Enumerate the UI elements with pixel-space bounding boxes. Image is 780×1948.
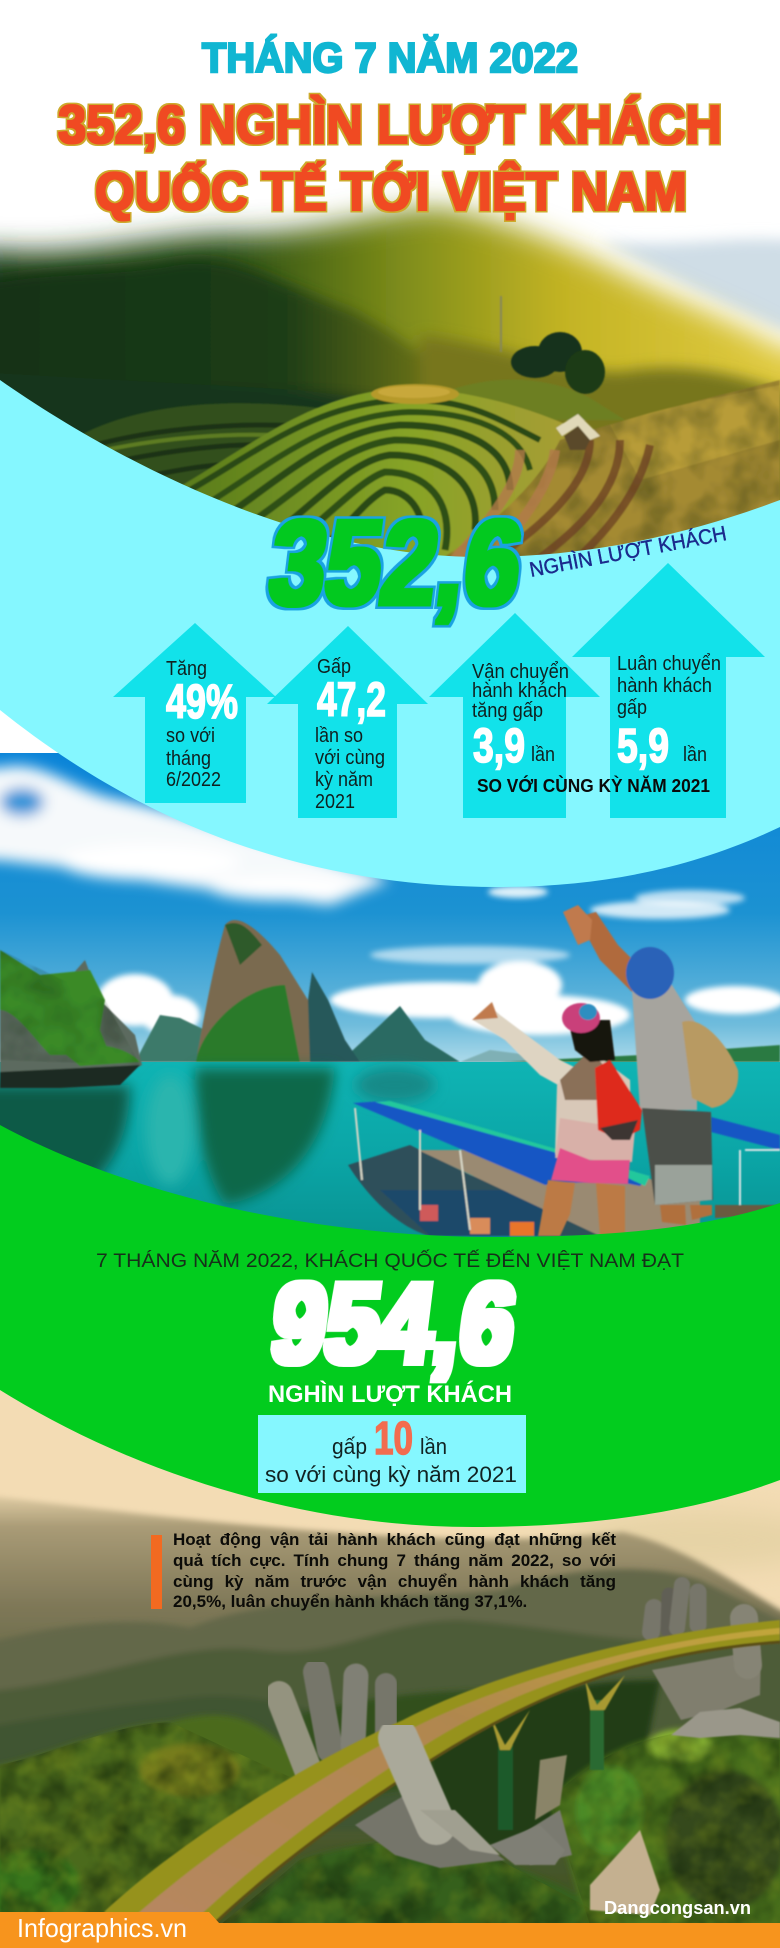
- arrow 2: lần so: [315, 725, 363, 747]
- headline line 1: 352,6 NGHÌN LƯỢT KHÁCH: [58, 95, 722, 155]
- paragraph: passenger transport: [173, 1530, 616, 1611]
- arrow 2: 2021: [315, 791, 355, 813]
- comparison box: [258, 1412, 526, 1493]
- arrow 2: kỳ năm: [315, 769, 373, 791]
- woman: [472, 1002, 642, 1236]
- clouds: [0, 766, 780, 1035]
- big number 352,6: 352,6: [263, 495, 529, 630]
- photo: rice terraces and mountains: [0, 208, 780, 580]
- seven-month heading: 7 THÁNG NĂM 2022, KHÁCH QUỐC TẾ ĐẾN VIỆT NAM ĐẠT: [96, 1248, 684, 1272]
- photo: bay with karst islands and travellers: [0, 753, 780, 1252]
- hand: left fingers: [279, 1672, 386, 1770]
- arrow 3: Vận chuyển: [472, 661, 569, 683]
- footer bar: Infographics.vn: [17, 1913, 187, 1943]
- source credit: Dangcongsan.vn: [604, 1898, 751, 1918]
- forest: [0, 1680, 780, 1935]
- comparison box: lần: [420, 1434, 447, 1459]
- distant mountains: [135, 920, 780, 1062]
- hand: right: [651, 1585, 780, 1738]
- headline line 2: QUỐC TẾ TỚI VIỆT NAM: [95, 161, 687, 222]
- arrow 3: hành khách: [472, 680, 567, 702]
- path and rock detail: [520, 1755, 660, 1915]
- tree clump: [511, 332, 605, 394]
- bridge pillars: [490, 1675, 625, 1830]
- paragraph marker bar: [151, 1535, 162, 1609]
- arrow 3: 3,9: [473, 720, 525, 773]
- arrow 3: lần: [531, 744, 555, 766]
- boat: [348, 1101, 780, 1236]
- footer bar: [0, 1912, 780, 1948]
- arrow 1: 49%: [166, 676, 238, 729]
- antenna pole: [500, 296, 502, 352]
- title: [58, 34, 722, 222]
- arrow 1: Tăng: [166, 658, 207, 680]
- right hillside: [440, 380, 780, 560]
- water reflections: [0, 1067, 435, 1205]
- mountain ridges: [0, 1569, 780, 1830]
- paragraph: passenger transport: cùng kỳ năm trước vận chuyển hành khách tăng: [173, 1572, 616, 1591]
- travellers: [472, 905, 738, 1236]
- arrow 2: Gấp: [317, 656, 351, 678]
- arrow 2: [267, 626, 428, 818]
- arrow 1: tháng: [166, 748, 211, 770]
- paragraph: passenger transport: 20,5%, luân chuyển hành khách tăng 37,1%.: [173, 1592, 527, 1611]
- comparison box: 10: [374, 1412, 413, 1464]
- hand: thumb in front of bridge: [355, 1738, 565, 1868]
- arrow 3: [429, 613, 600, 818]
- arrow 4: [572, 563, 765, 818]
- arrow 4: hành khách: [617, 675, 712, 697]
- big number 954,6: 954,6: [265, 1260, 522, 1386]
- comparison box: so với cùng kỳ năm 2021: [265, 1462, 517, 1487]
- bridge deck: [104, 1620, 780, 1925]
- arrow 4: lần: [683, 744, 707, 766]
- arrow 2: với cùng: [315, 747, 385, 769]
- unit label: NGHÌN LƯỢT KHÁCH: [528, 522, 728, 582]
- subtitle: month: THÁNG 7 NĂM 2022: [202, 34, 578, 81]
- man: [563, 905, 738, 1225]
- arrow 2: 47,2: [317, 674, 386, 727]
- paragraph: passenger transport: Hoạt động vận tải hành khách cũng đạt những kết: [173, 1530, 616, 1549]
- arrow 1: so với: [166, 725, 215, 747]
- hut: [556, 414, 600, 450]
- arrow 4: gấp: [617, 697, 647, 719]
- left island: [0, 950, 142, 1088]
- arrow 3: tăng gấp: [472, 700, 543, 722]
- comparison box: gấp: [332, 1434, 367, 1459]
- comparison note: SO VỚI CÙNG KỲ NĂM 2021: [477, 775, 710, 796]
- terraced hill: [174, 388, 640, 560]
- arrow 4: Luân chuyển: [617, 653, 721, 675]
- panel: green seven-month figures: [0, 1125, 780, 1527]
- panel: cyan July figures: [0, 380, 780, 887]
- paragraph: passenger transport: quả tích cực. Tính chung 7 tháng năm 2022, so với: [173, 1551, 616, 1570]
- photo: Golden Bridge at Ba Na Hills: [0, 1380, 780, 1948]
- unit label: NGHÌN LƯỢT KHÁCH: [268, 1380, 512, 1408]
- arrow 4: 5,9: [617, 720, 669, 773]
- arrow 1: 6/2022: [166, 769, 221, 791]
- arrow 1: [113, 623, 276, 803]
